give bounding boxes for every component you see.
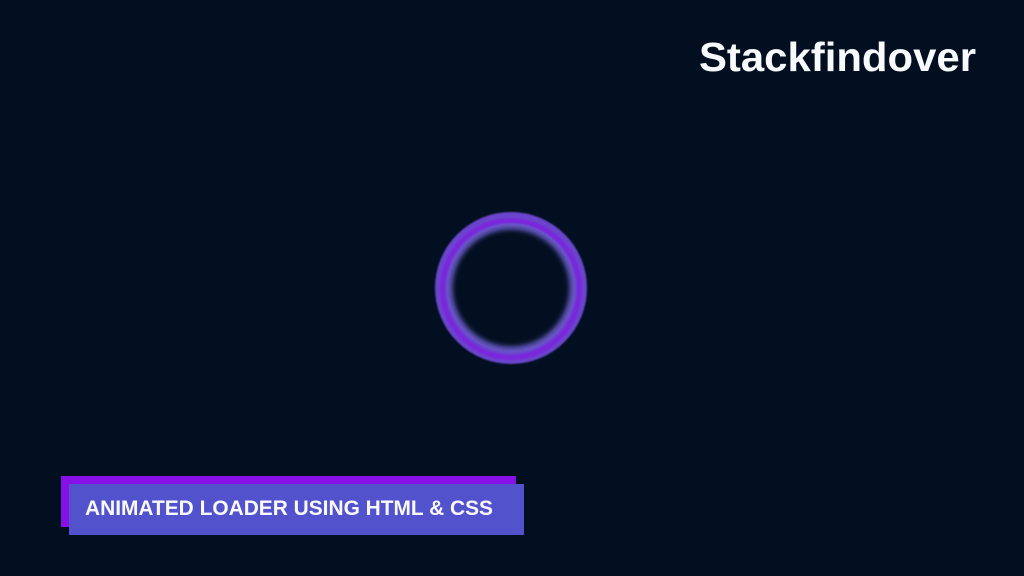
loader ring	[442, 218, 580, 358]
banner back layer	[61, 476, 516, 527]
banner front layer	[69, 484, 524, 535]
caption banner	[61, 476, 524, 535]
brand title: Stackfindover	[699, 34, 976, 80]
banner text: ANIMATED LOADER USING HTML & CSS	[85, 496, 493, 520]
